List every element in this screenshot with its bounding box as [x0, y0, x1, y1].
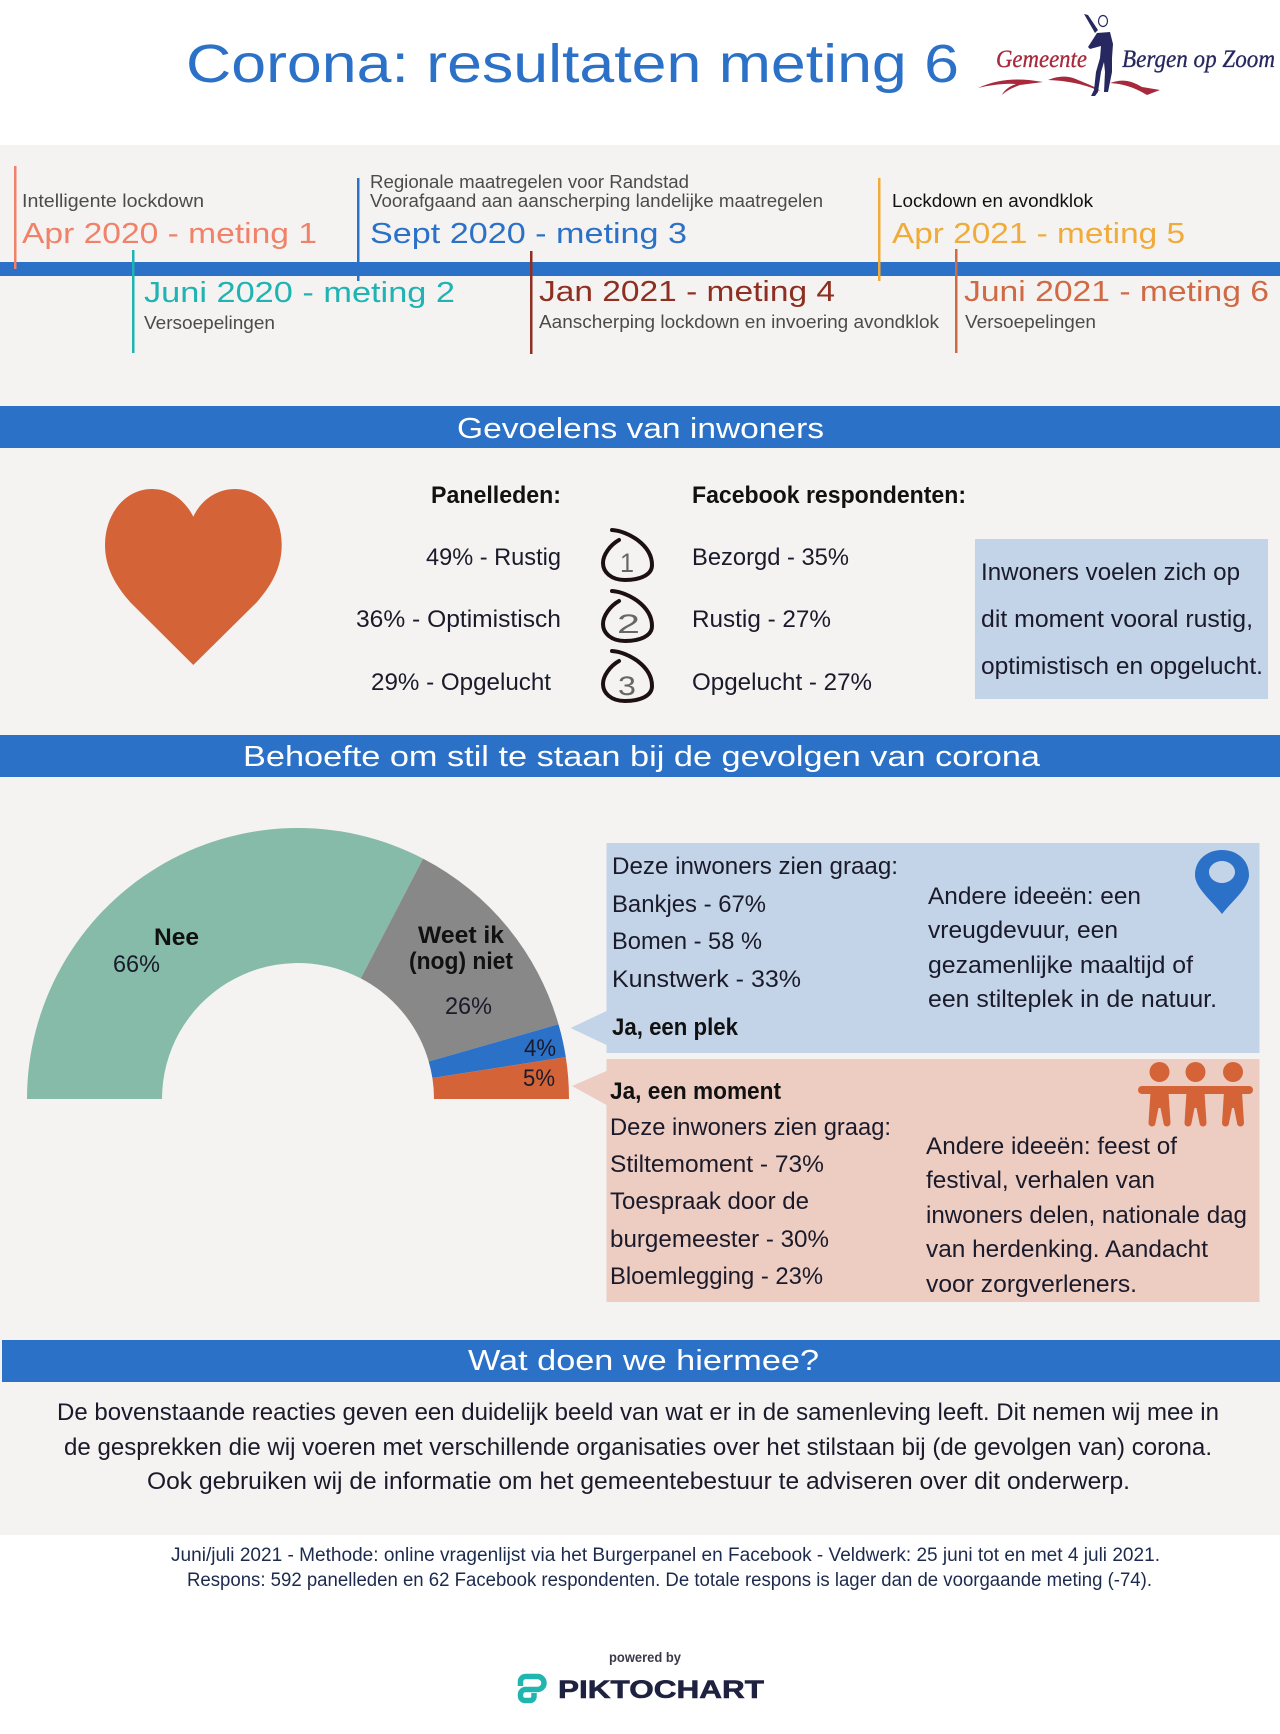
timeline: meting 6: [955, 249, 1269, 353]
timeline: meting 4: Aanscherping lockdown en invoering avondklok: [539, 312, 940, 332]
footnote: methode en respons: Respons: 592 panelleden en 62 Facebook respondenten. De totale respons is lager dan de voorgaande meting (-74).: [187, 1570, 1152, 1591]
label: 5%: 5%: [523, 1065, 555, 1092]
panel: Ja, een moment: festival, verhalen van: [926, 1167, 1155, 1194]
timeline: meting 3: [357, 172, 823, 281]
segment: Ja, een moment: [432, 1057, 569, 1099]
list: facebook respondenten: Opgelucht - 27%: [692, 669, 872, 696]
chart: half donut: [27, 828, 569, 1099]
label: Weet ik (nog) niet: (nog) niet: [409, 948, 513, 975]
list: panelleden: [356, 482, 561, 696]
panel: Ja, een moment: van herdenking. Aandacht: [926, 1236, 1208, 1263]
footnote: methode en respons: [171, 1545, 1160, 1591]
panel: Ja, een moment: Bloemlegging - 23%: [610, 1263, 823, 1290]
timeline: meting 1: [14, 166, 317, 269]
icon: hand-drawn number 3: [603, 651, 652, 701]
logo: powered by Piktochart: powered by: [609, 1649, 681, 1665]
logo: powered by Piktochart: [520, 1649, 764, 1704]
icon: hand-drawn number 2: 2: [617, 609, 640, 639]
panel: Ja, een moment: inwoners delen, nationale dag: [926, 1202, 1247, 1229]
timeline: meting 2: [132, 250, 455, 353]
panel: Ja, een moment: Andere ideeën: feest of: [926, 1133, 1177, 1160]
segment: Nee: [27, 828, 423, 1099]
panel: Ja, een moment: Ja, een moment: [610, 1078, 781, 1105]
list: panelleden: 36% - Optimistisch: [356, 606, 561, 633]
timeline: meting 3: Regionale maatregelen voor Randstad: [370, 172, 689, 192]
list: facebook respondenten: Rustig - 27%: [692, 606, 831, 633]
footnote: methode en respons: Juni/juli 2021 - Methode: online vragenlijst via het Burgerpanel en Facebook - Veldwerk: 25 juni tot en met 4 juli 2021.: [171, 1545, 1160, 1566]
timeline: meting 5: Lockdown en avondklok: [892, 191, 1094, 211]
timeline: meting 2: Juni 2020 - meting 2: [144, 277, 455, 309]
heading: Behoefte om stil te staan: Behoefte om stil te staan bij de gevolgen van corona: [243, 741, 1041, 773]
icon: hand-drawn number 2: [603, 591, 652, 641]
panel: Ja, een moment: Toespraak door de: [610, 1188, 809, 1215]
text block: conclusie: [57, 1399, 1219, 1495]
panel: Ja, een moment: Stiltemoment - 73%: [610, 1151, 824, 1178]
timeline: meting 6: Juni 2021 - meting 6: [964, 276, 1269, 308]
timeline bar: [0, 262, 1280, 276]
icon: heart: [105, 489, 282, 665]
panel: Ja, een moment: burgemeester - 30%: [610, 1226, 829, 1253]
panel: Ja, een plek: Bomen - 58 %: [612, 928, 762, 955]
logo: Gemeente Bergen op Zoom: Gemeente: [996, 46, 1087, 73]
panel: Ja, een moment: voor zorgverleners.: [926, 1271, 1137, 1298]
panel: Ja, een moment: [572, 1059, 1260, 1302]
timeline: meting 3: Sept 2020 - meting 3: [370, 218, 687, 250]
heading: Behoefte om stil te staan: [0, 735, 1280, 777]
segment: Ja, een plek: [429, 1024, 566, 1078]
heading: Gevoelens van inwoners: Gevoelens van inwoners: [457, 413, 824, 445]
panel: Ja, een plek: Kunstwerk - 33%: [612, 966, 801, 993]
icon: three people: [1138, 1062, 1253, 1126]
panel: Ja, een plek: een stilteplek in de natuur.: [928, 986, 1217, 1013]
icon: hand-drawn number 1: [603, 530, 652, 580]
panel: Ja, een plek: [571, 843, 1260, 1053]
timeline: meting 4: [530, 251, 940, 354]
text block: conclusie: De bovenstaande reacties geven een duidelijk beeld van wat er in de samenleving leeft. Dit nemen wij mee in: [57, 1399, 1219, 1426]
panel: Ja, een plek: gezamenlijke maaltijd of: [928, 952, 1193, 979]
heading: Wat doen we hiermee?: Wat doen we hiermee?: [468, 1345, 819, 1377]
list: panelleden: 49% - Rustig: [426, 544, 561, 571]
list: panelleden: Panelleden:: [431, 482, 561, 509]
icon: hand-drawn number 3: 3: [618, 671, 636, 701]
timeline: meting 5: Apr 2021 - meting 5: [892, 218, 1185, 250]
text block: conclusie: Ook gebruiken wij de informatie om het gemeentebestuur te adviseren over dit onderwerp.: [147, 1468, 1130, 1495]
panel: Ja, een plek: vreugdevuur, een: [928, 917, 1118, 944]
title: Corona: resultaten meting 6: [186, 34, 959, 94]
timeline: meting 3: Voorafgaand aan aanscherping landelijke maatregelen: [370, 191, 823, 211]
timeline: meting 1: Intelligente lockdown: [22, 191, 204, 211]
panel: Ja, een plek: Ja, een plek: [612, 1014, 739, 1041]
callout: conclusie gevoelens: dit moment vooral rustig,: [981, 606, 1253, 633]
list: facebook respondenten: Bezorgd - 35%: [692, 544, 849, 571]
logo: Gemeente Bergen op Zoom: [978, 14, 1275, 96]
panel: Ja, een moment: Deze inwoners zien graag:: [610, 1114, 891, 1141]
segment: Weet ik (nog) niet: [361, 859, 558, 1062]
list: facebook respondenten: [692, 482, 966, 696]
label: 4%: 4%: [524, 1035, 556, 1062]
timeline: meting 5: [878, 178, 1185, 281]
logo: powered by Piktochart: PIKTOCHART: [558, 1676, 764, 1704]
icon: location pin: [1195, 850, 1249, 914]
panel: Ja, een plek: Andere ideeën: een: [928, 883, 1141, 910]
text block: conclusie: de gesprekken die wij voeren met verschillende organisaties over het stilstaan bij (de gevolgen van) corona.: [64, 1434, 1212, 1461]
timeline: meting 6: Versoepelingen: [965, 312, 1096, 332]
callout: conclusie gevoelens: Inwoners voelen zich op: [981, 559, 1240, 586]
label: Weet ik (nog) niet: Weet ik: [418, 922, 505, 949]
panel: Ja, een plek: Deze inwoners zien graag:: [612, 853, 898, 880]
timeline: meting 1: Apr 2020 - meting 1: [22, 218, 317, 250]
list: facebook respondenten: Facebook respondenten:: [692, 482, 966, 509]
label: Weet ik (nog) niet: [409, 922, 513, 975]
timeline: meting 2: Versoepelingen: [144, 313, 275, 333]
heading: Wat doen we hiermee?: [2, 1340, 1280, 1382]
label: Nee: Nee: [154, 924, 199, 951]
callout: conclusie gevoelens: optimistisch en opgelucht.: [981, 653, 1263, 680]
timeline: meting 4: Jan 2021 - meting 4: [539, 276, 835, 308]
heading: Gevoelens van inwoners: [0, 406, 1280, 448]
callout: conclusie gevoelens: [975, 539, 1268, 699]
icon: hand-drawn number 1: 1: [620, 548, 634, 578]
label: 26%: 26%: [445, 993, 492, 1020]
list: panelleden: 29% - Opgelucht: [371, 669, 551, 696]
label: 66%: 66%: [113, 951, 160, 978]
panel: Ja, een plek: Bankjes - 67%: [612, 891, 766, 918]
